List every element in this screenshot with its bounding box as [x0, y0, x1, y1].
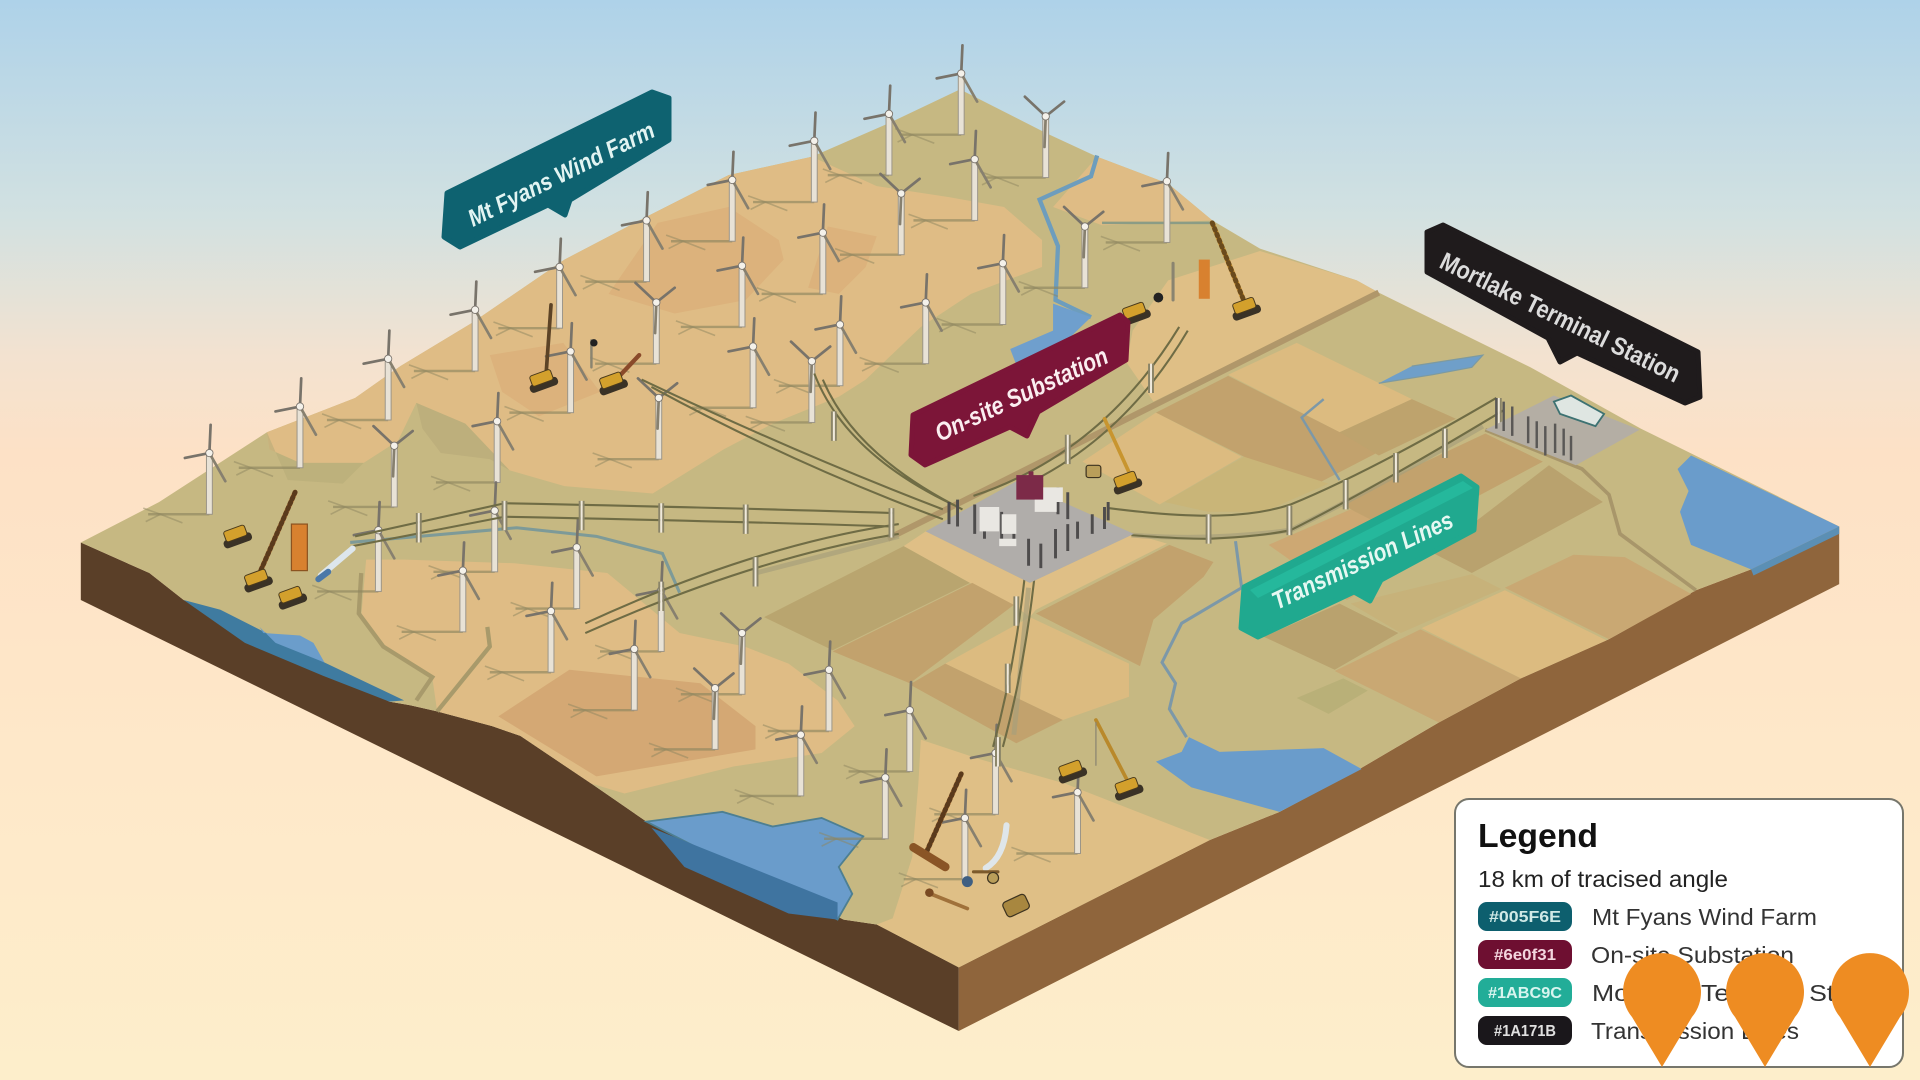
hills: tan contours — [267, 157, 1379, 967]
legend row: Mortlake Terminal Station: #1ABC9C — [1488, 985, 1562, 1002]
callout: Transmission Lines — [1241, 476, 1477, 637]
upper-right crane group — [1121, 223, 1262, 327]
legend row: Mt Fyans Wind Farm — [1478, 902, 1817, 931]
left site machinery — [223, 492, 353, 611]
callout: Transmission Lines: Transmission Lines — [1268, 506, 1458, 615]
callout: Mortlake Terminal Station: Mortlake Terminal Station — [1435, 247, 1685, 389]
legend subtitle: 18 km of tracised angle — [1478, 866, 1728, 892]
legend title: Legend — [1478, 817, 1598, 854]
wind turbines — [143, 45, 1183, 888]
legend row: On-site Substation: On-site Substation — [1591, 942, 1794, 968]
construction cranes and machinery — [223, 223, 1262, 918]
farmland fields — [764, 343, 1696, 743]
earth side: left face — [81, 542, 959, 1031]
legend row: Mt Fyans Wind Farm: #005F6E — [1489, 909, 1561, 926]
map pin markers — [1623, 953, 1909, 1067]
upper-left pile rig and excavator — [529, 305, 639, 396]
legend row: Mortlake Terminal Station — [1478, 978, 1892, 1007]
legend row: Mortlake Terminal Station: Mortlake Terminal Station — [1592, 980, 1892, 1006]
transmission lines and poles — [353, 327, 1504, 767]
substation crane — [1086, 419, 1143, 496]
access road — [888, 293, 1379, 539]
south-east crane — [1058, 720, 1144, 802]
legend row: Transmission Lines — [1478, 1016, 1799, 1045]
legend row: Transmission Lines: #1A171B — [1494, 1023, 1556, 1040]
legend row: Transmission Lines: Transmission Lines — [1591, 1018, 1799, 1044]
water: lakes and rivers — [184, 156, 1839, 920]
callout: On-site Substation: On-site Substation — [931, 342, 1113, 447]
callout: Mt Fyans Wind Farm: Mt Fyans Wind Farm — [464, 117, 659, 232]
south crane and turbine parts — [913, 774, 1031, 918]
legend row: On-site Substation — [1478, 940, 1794, 969]
terrain top surface — [81, 89, 1839, 967]
callout: On-site Substation — [911, 315, 1128, 465]
on-site substation — [926, 471, 1134, 583]
legend panel — [1455, 799, 1903, 1067]
legend row: On-site Substation: #6e0f31 — [1494, 947, 1556, 964]
earth side: right face — [959, 527, 1839, 1031]
legend row: Mt Fyans Wind Farm: Mt Fyans Wind Farm — [1592, 904, 1817, 930]
mortlake terminal station — [1485, 396, 1640, 465]
